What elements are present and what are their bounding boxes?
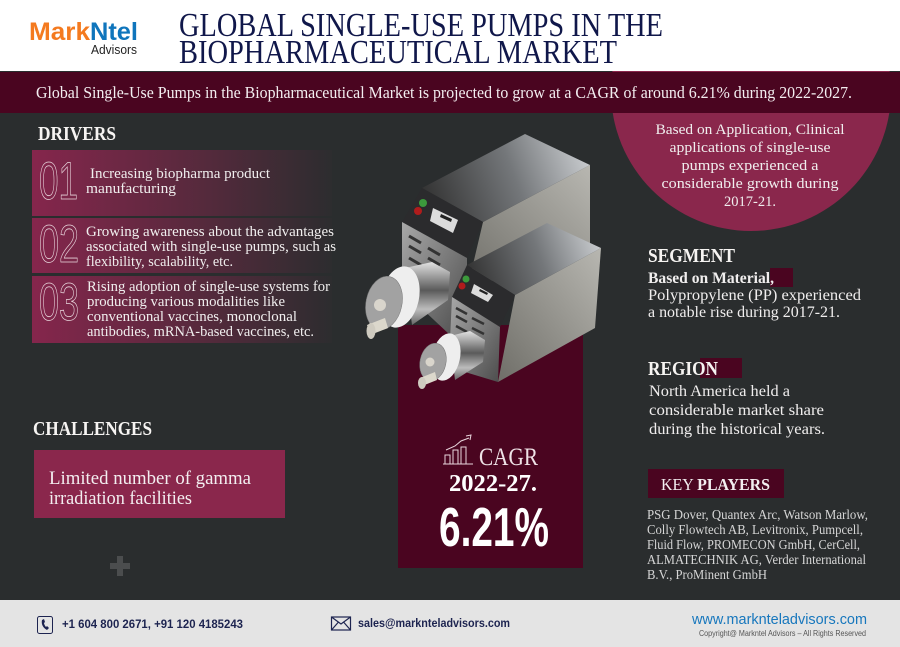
challenges box [34,450,285,518]
header [0,0,900,71]
logo: Advisors [91,42,137,57]
decorative plus [110,556,130,576]
driver 03: conventional vaccines, monoclonal [87,309,297,325]
icon: mail [332,617,350,630]
region: during the historical years. [649,421,825,438]
segment: Polypropylene (PP) experienced [648,287,861,304]
CAGR panel: CAGR [479,444,538,471]
email: sales@marknteladvisors.com [358,618,510,630]
copyright: Copyright@ Markntel Advisors – All Rights Reserved [699,629,866,638]
title: GLOBAL SINGLE-USE PUMPS IN THE [179,7,663,44]
key players list [647,508,868,583]
subtitle band: Global Single-Use Pumps in the Biopharmaceutical Market is projected to grow at a CAGR of around 6.21% during 2022-2027. [36,83,852,102]
driver 01: manufacturing [86,181,177,197]
logo: Ntel [90,18,138,46]
region [648,358,825,438]
key players [647,469,868,583]
website: www.marknteladvisors.com [691,611,867,628]
application text: applications of single-use [670,140,831,156]
driver 03: antibodies, mRNA-based vaccines, etc. [87,324,314,340]
driver 02: Growing awareness about the advantages [86,224,334,240]
logo [29,18,138,57]
driver 03: Rising adoption of single-use systems for [87,279,330,295]
driver 01 [32,150,332,216]
key players list: ALMATECHNIK AG, Verder International [647,553,866,568]
driver 02: 02 [39,215,79,274]
icon: growth chart [443,435,473,464]
pump image [361,134,601,389]
driver 01: Increasing biopharma product [90,166,271,182]
driver 03 [32,273,332,343]
segment: SEGMENT [648,245,736,267]
dark background [0,113,900,600]
driver 02: flexibility, scalability, etc. [86,254,233,270]
application text: 2017-21. [724,194,776,210]
driver 03: 03 [39,273,79,332]
front pump [416,223,601,389]
region: North America held a [649,383,790,400]
CAGR panel: 6.21% [439,496,549,558]
CAGR panel [398,325,583,568]
application text: pumps experienced a [682,158,819,174]
application text: Based on Application, Clinical [656,122,844,138]
challenges box: Limited number of gamma [49,469,251,489]
title: BIOPHARMACEUTICAL MARKET [179,34,617,71]
title [179,7,663,71]
key players list: Colly Flowtech AB, Levitronix, Pumpcell, [647,523,863,538]
segment [648,245,861,321]
segment: a notable rise during 2017-21. [648,304,840,321]
challenges heading: CHALLENGES [33,418,152,440]
key players list: Fluid Flow, PROMECON GmbH, CerCell, [647,538,860,553]
challenges box: irradiation facilities [49,489,192,509]
key players list: B.V., ProMinent GmbH [647,568,767,583]
driver 02 [32,215,336,274]
back pump [361,134,590,339]
drivers heading: DRIVERS [38,123,116,145]
application text: considerable growth during [662,176,839,192]
key players: KEY PLAYERS [661,475,770,494]
key players list: PSG Dover, Quantex Arc, Watson Marlow, [647,508,868,523]
region: REGION [648,358,718,380]
driver 02: associated with single-use pumps, such as [86,239,336,255]
segment: Based on Material, [648,270,774,287]
region: considerable market share [649,402,824,419]
subtitle band [0,72,900,113]
driver 01: 01 [39,152,78,211]
icon: phone [38,616,52,634]
driver 03: producing various modalities like [87,294,285,310]
application text [656,122,844,210]
application circle [611,0,891,231]
logo: Mark [29,18,90,46]
CAGR panel: 2022-27. [449,471,537,497]
footer [0,600,900,647]
phone number: +1 604 800 2671, +91 120 4185243 [62,619,243,631]
